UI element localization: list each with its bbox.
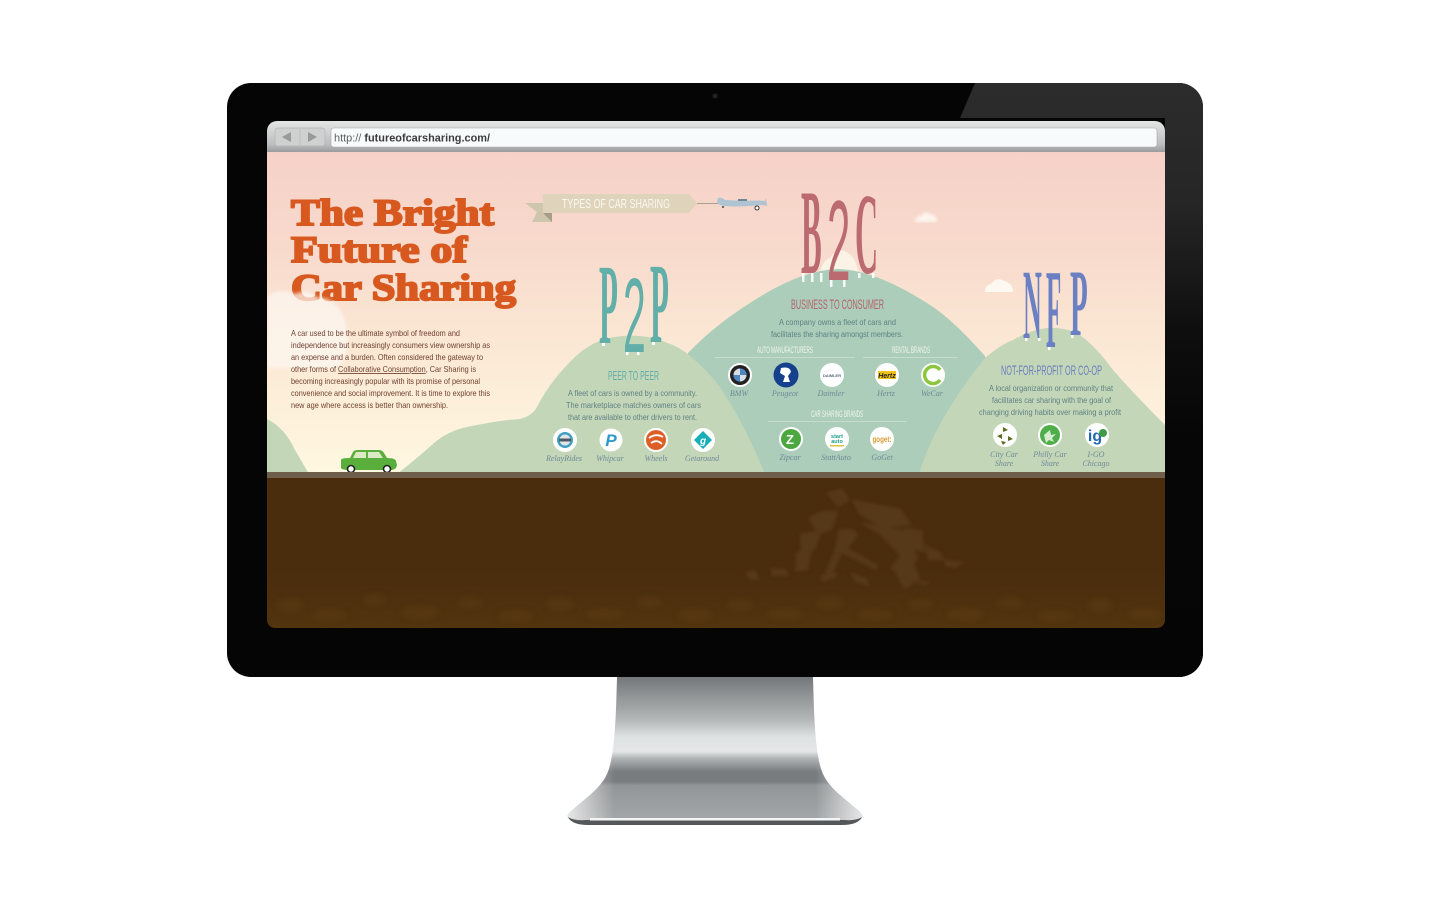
NFP description: changing driving habits over making a profit [979, 408, 1122, 417]
NFP description: facilitates car sharing with the goal of [992, 396, 1112, 405]
NFP subtitle: NOT-FOR-PROFIT OR CO-OP [1001, 362, 1102, 378]
B2C heading: C [855, 171, 878, 299]
NFP heading: F [1046, 248, 1061, 372]
P2P description: A fleet of cars is owned by a community. [568, 389, 697, 398]
B2C subtitle: BUSINESS TO CONSUMER [791, 296, 884, 312]
banner: types of car sharing: TYPES OF CAR SHARING [562, 196, 670, 211]
title [291, 193, 517, 309]
title: The Bright [291, 193, 495, 234]
NFP panel [979, 362, 1122, 468]
icon: plane [697, 198, 767, 210]
B2C logos [728, 362, 945, 451]
B2C logos: Z [786, 432, 794, 447]
B2C logos: goget: [872, 435, 892, 444]
P2P description [566, 389, 701, 422]
NFP labels: I-GO [1087, 450, 1105, 459]
NFP heading [1024, 272, 1087, 350]
NFP description [979, 384, 1122, 417]
intro paragraph: independence but increasingly consumers view ownership as [291, 340, 490, 350]
B2C labels: BMW [730, 389, 749, 398]
NFP labels: Share [995, 459, 1014, 468]
NFP labels: Chicago [1082, 459, 1110, 468]
title: Future of [291, 230, 468, 271]
fossil silhouette [745, 488, 965, 590]
browser toolbar [267, 121, 1165, 152]
NFP hill [919, 328, 1165, 474]
large cloud left [267, 291, 347, 369]
car sharing brands subheading: CAR SHARING BRANDS [811, 409, 863, 419]
monitor bezel [227, 83, 1203, 677]
P2P labels: Wheels [644, 454, 668, 463]
intro paragraph: an expense and a burden. Often considered the gateway to [291, 352, 483, 362]
auto manufacturers subheading: AUTO MANUFACTURERS [757, 345, 813, 355]
left small hill [267, 419, 309, 474]
intro paragraph: new age where access is better than ownership. [291, 400, 448, 410]
B2C logos: Hertz [878, 373, 896, 380]
P2P logos: g [699, 436, 706, 447]
NFP logos: ig [1088, 428, 1102, 445]
P2P description: that are available to other drivers to rent. [568, 413, 697, 422]
B2C heading [802, 194, 876, 287]
address bar [331, 128, 1157, 147]
NFP labels: Share [1041, 459, 1060, 468]
NFP labels [990, 450, 1110, 468]
B2C labels: Peugeot [771, 389, 799, 398]
B2C description: A company owns a fleet of cars and [779, 318, 896, 327]
P2P heading: 2 [623, 257, 646, 376]
rental brands subheading: RENTAL BRANDS [892, 345, 930, 355]
small cloud right of B2C [915, 212, 937, 222]
B2C heading: B [801, 166, 822, 300]
P2P labels: Getaround [685, 454, 720, 463]
NFP heading: P [1070, 251, 1088, 357]
B2C heading: 2 [827, 178, 850, 305]
P2P heading: P [650, 242, 669, 368]
B2C labels: Daimler [817, 389, 845, 398]
title: Car Sharing [291, 268, 517, 309]
NFP labels: City Car [990, 450, 1019, 459]
B2C logos: start [831, 434, 843, 440]
B2C labels: Hertz [876, 389, 896, 398]
P2P subtitle: PEER TO PEER [608, 368, 659, 383]
intro paragraph: convenience and social improvement. It is time to explore this [291, 388, 490, 398]
back and forward buttons [275, 128, 325, 146]
intro paragraph: becoming increasingly popular with its promise of personal [291, 376, 480, 386]
sky background [267, 152, 1165, 474]
intro paragraph: other forms of Collaborative Consumption, Car Sharing is [291, 364, 476, 374]
soil [267, 478, 1165, 628]
P2P heading [600, 266, 668, 355]
NFP logos [993, 423, 1109, 447]
NFP labels: Philly Car [1032, 450, 1068, 459]
P2P labels: Whipcar [596, 454, 625, 463]
banner: types of car sharing [525, 194, 697, 222]
soil texture [276, 594, 1162, 622]
small cloud left of NFP [985, 279, 1013, 292]
auto manufacturers subheading [715, 345, 855, 358]
P2P panel [545, 368, 720, 463]
B2C labels: StattAuto [821, 453, 851, 462]
P2P heading: P [599, 243, 618, 369]
P2P labels: RelayRides [545, 454, 582, 463]
P2P description: The marketplace matches owners of cars [566, 401, 701, 410]
B2C labels: WeCar [921, 389, 944, 398]
monitor stand [568, 677, 862, 825]
B2C logos: auto [831, 439, 843, 445]
browser screen [267, 121, 1165, 628]
B2C panel [715, 296, 958, 462]
B2C description: facilitates the sharing amongst members. [771, 330, 903, 339]
car sharing brands subheading [768, 409, 907, 422]
intro paragraph: A car used to be the ultimate symbol of freedom and [291, 328, 460, 338]
NFP heading: N [1023, 249, 1042, 360]
P2P logos: P [605, 431, 617, 450]
address bar: http:// futureofcarsharing.com/ [334, 132, 490, 144]
cloud behind B2C [820, 250, 858, 272]
intro paragraph [291, 328, 490, 410]
B2C labels: Zipcar [779, 453, 802, 462]
P2P labels [546, 455, 720, 463]
B2C labels [730, 389, 944, 462]
B2C logos: DAIMLER [823, 373, 841, 378]
B2C hill [688, 269, 986, 472]
ground band [267, 472, 1165, 478]
P2P hill [397, 336, 765, 474]
NFP description: A local organization or community that [989, 384, 1114, 393]
rental brands subheading [863, 345, 958, 358]
B2C description [771, 318, 903, 339]
P2P logos [553, 428, 715, 452]
B2C labels: GoGet [871, 453, 893, 462]
icon: green car [341, 450, 397, 472]
